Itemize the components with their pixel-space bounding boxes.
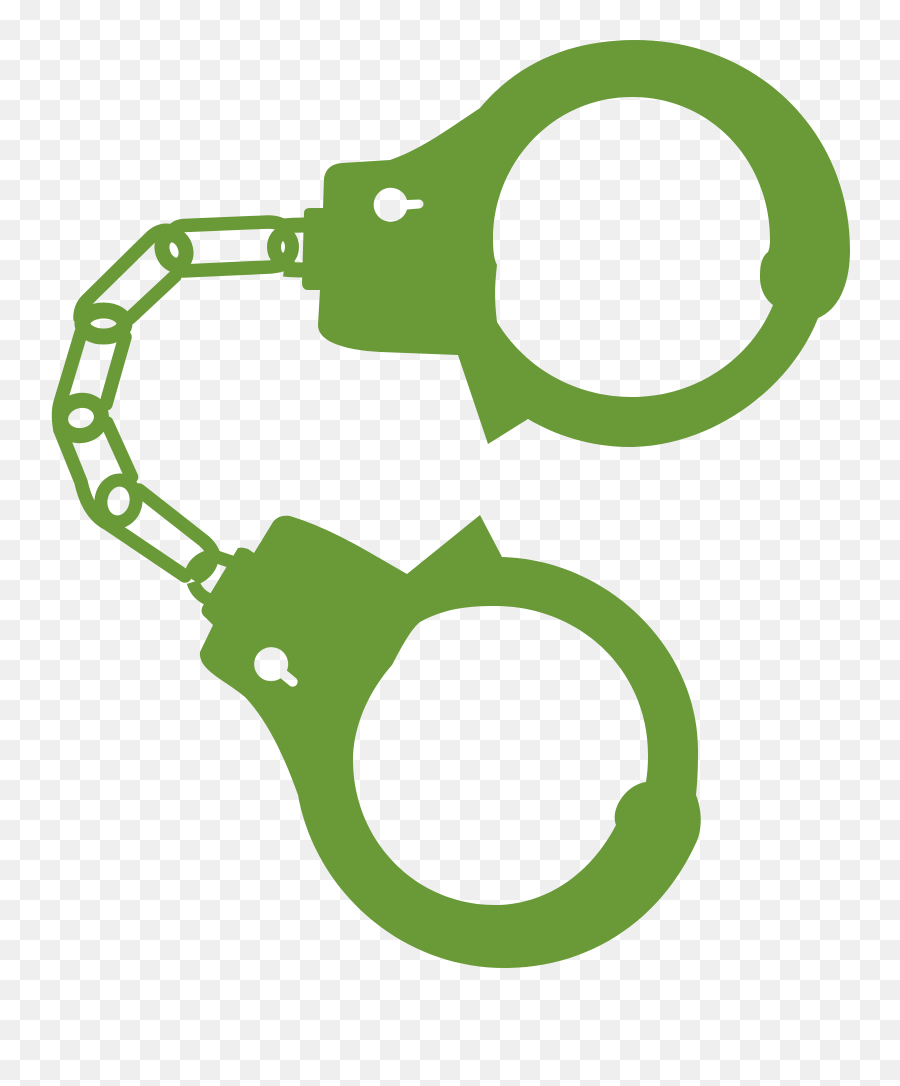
ring 5: [98, 477, 139, 525]
ring 3: [82, 310, 124, 336]
link 3: [58, 333, 125, 430]
ring 1: [158, 232, 190, 268]
upper clevis: [284, 225, 306, 270]
lower cuff: [200, 515, 701, 968]
link 4: [60, 423, 185, 576]
upper cuff: [302, 40, 850, 447]
link 2: [80, 230, 175, 318]
chain: [58, 222, 306, 600]
chain rings: [57, 232, 292, 584]
lower clevis: [193, 556, 232, 600]
ring 4: [57, 397, 105, 439]
ring 2: [274, 234, 292, 260]
ring 6: [186, 549, 218, 584]
link 5: [139, 490, 214, 556]
link 1: [172, 222, 288, 271]
